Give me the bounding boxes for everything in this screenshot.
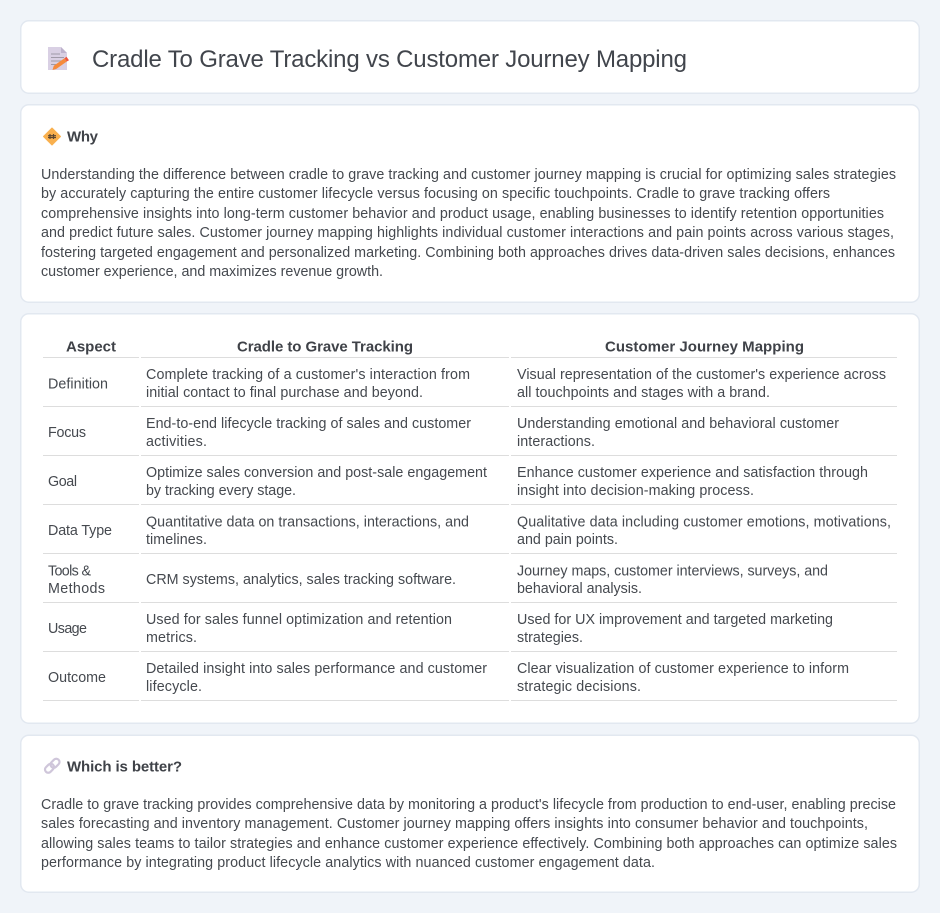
row: focus: Understanding emotional and behavioral customer bbox=[517, 416, 839, 432]
text block: which is better paragraph: allowing sales teams to tailor strategies and enhance customer experience effectively. Combining both approaches can optimize sales bbox=[41, 836, 897, 852]
text block: why paragraph: customer experience, and maximizes revenue growth. bbox=[41, 264, 383, 280]
text block: which is better paragraph: Cradle to grave tracking provides comprehensive data by monitoring a product's lifecycle from production to end-user, enabling precise bbox=[41, 797, 896, 813]
row: usage bbox=[48, 612, 833, 646]
row: goal: insight into decision-making process. bbox=[517, 483, 754, 499]
row: definition: initial contact to final purchase and beyond. bbox=[146, 385, 423, 401]
row: outcome: Detailed insight into sales performance and customer bbox=[146, 661, 487, 677]
row: tools and methods: Tools & bbox=[48, 564, 91, 580]
row: data type: Qualitative data including customer emotions, motivations, bbox=[517, 514, 891, 530]
text block: why paragraph: Understanding the difference between cradle to grave tracking and customer journey mapping is crucial for optimizing sales strategies bbox=[41, 167, 896, 183]
text block: which is better paragraph: sales forecasting and inventory management. Customer journey mapping offers insights into consumer behavior and touchpoints, bbox=[41, 816, 868, 832]
text block: why paragraph: fostering targeted engagement and personalized marketing. Combining both approaches drives data-driven sales decisions, enhances bbox=[41, 245, 895, 261]
row: data type bbox=[48, 514, 891, 548]
row: tools and methods: behavioral analysis. bbox=[517, 581, 642, 597]
row: outcome: Outcome bbox=[48, 670, 106, 686]
row: focus: activities. bbox=[146, 434, 207, 450]
row: outcome: strategic decisions. bbox=[517, 679, 641, 695]
row: usage: strategies. bbox=[517, 630, 583, 646]
row: outcome: Clear visualization of customer experience to inform bbox=[517, 661, 849, 677]
heading: why: Why bbox=[67, 128, 99, 146]
row: goal: Goal bbox=[48, 474, 77, 490]
row: tools and methods: Journey maps, customer interviews, surveys, and bbox=[517, 564, 828, 580]
row: focus bbox=[48, 416, 839, 450]
panel: which is better bbox=[21, 735, 919, 892]
row: tools and methods bbox=[48, 564, 828, 597]
panel: why bbox=[21, 105, 919, 302]
table header row: Cradle to Grave Tracking bbox=[237, 338, 413, 356]
text block: why paragraph: and predict future sales. Customer journey mapping highlights individual customer interactions and pain points across various stages, bbox=[41, 225, 894, 241]
title: Cradle To Grave Tracking vs Customer Journey Mapping bbox=[92, 46, 687, 73]
row: usage: Used for UX improvement and targeted marketing bbox=[517, 612, 833, 628]
row: goal: Optimize sales conversion and post-sale engagement bbox=[146, 465, 487, 481]
row: definition: Definition bbox=[48, 376, 108, 392]
text block: which is better paragraph bbox=[41, 797, 897, 871]
icon: orange diamond sign bbox=[44, 128, 60, 145]
row: tools and methods: Methods bbox=[48, 581, 105, 597]
row: definition: Visual representation of the customer's experience across bbox=[517, 367, 886, 383]
row: data type: timelines. bbox=[146, 532, 207, 548]
row: definition: Complete tracking of a customer's interaction from bbox=[146, 367, 470, 383]
row: tools and methods: CRM systems, analytics, sales tracking software. bbox=[146, 572, 456, 588]
row: outcome: lifecycle. bbox=[146, 679, 202, 695]
row: definition: all touchpoints and stages with a brand. bbox=[517, 385, 770, 401]
panel: comparison table bbox=[21, 314, 919, 723]
row: focus: interactions. bbox=[517, 434, 595, 450]
row: goal: Enhance customer experience and satisfaction through bbox=[517, 465, 868, 481]
text block: why paragraph bbox=[41, 167, 896, 280]
row: focus: End-to-end lifecycle tracking of sales and customer bbox=[146, 416, 471, 432]
text block: why paragraph: comprehensive insights into long-term customer behavior and product usage, enabling businesses to identify retention opportunities bbox=[41, 206, 884, 222]
table header row bbox=[66, 338, 804, 356]
row: outcome bbox=[48, 661, 849, 695]
icon: document with pencil bbox=[48, 47, 69, 70]
text block: why paragraph: by accurately capturing the entire customer lifecycle versus focusing on specific touchpoints. Cradle to grave tracking offers bbox=[41, 186, 830, 202]
row: focus: Focus bbox=[48, 425, 86, 441]
text block: which is better paragraph: performance by integrating product lifecycle analytics with nuanced customer engagement data. bbox=[41, 855, 655, 871]
row: usage: metrics. bbox=[146, 630, 197, 646]
heading: which is better: Which is better? bbox=[67, 758, 182, 776]
row: data type: and pain points. bbox=[517, 532, 618, 548]
table header row: Customer Journey Mapping bbox=[605, 338, 804, 356]
table header row: Aspect bbox=[66, 338, 116, 356]
row: usage: Usage bbox=[48, 621, 87, 637]
row: definition bbox=[48, 367, 886, 401]
row: usage: Used for sales funnel optimization and retention bbox=[146, 612, 452, 628]
icon: chain link bbox=[44, 757, 61, 774]
row: data type: Quantitative data on transactions, interactions, and bbox=[146, 514, 469, 530]
panel: title header bbox=[21, 21, 919, 93]
row: data type: Data Type bbox=[48, 523, 112, 539]
row: goal bbox=[48, 465, 868, 499]
row: goal: by tracking every stage. bbox=[146, 483, 296, 499]
